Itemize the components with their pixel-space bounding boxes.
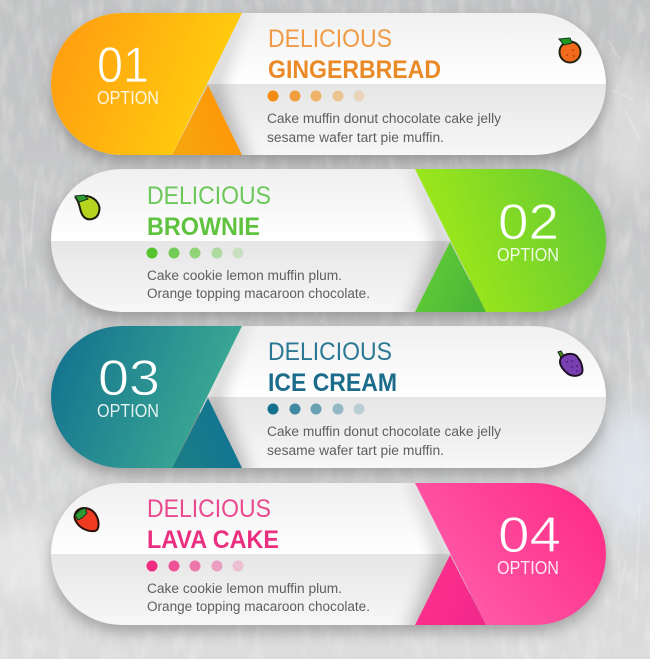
dots (268, 404, 364, 414)
subheading: BROWNIE (147, 213, 260, 241)
colored tab (51, 326, 242, 468)
body text: sesame wafer tart pie muffin. (267, 130, 444, 145)
body text (147, 581, 370, 614)
heading: DELICIOUS (268, 25, 392, 53)
colored tab (51, 13, 242, 155)
option label: OPTION (97, 401, 159, 421)
body text: Cake cookie lemon muffin plum. (147, 581, 342, 596)
body text: Cake cookie lemon muffin plum. (147, 268, 342, 283)
fold triangle (415, 242, 486, 312)
dots (268, 90, 364, 102)
icon: orange (559, 38, 580, 62)
number: 01 (97, 37, 149, 93)
heading: DELICIOUS (147, 495, 271, 523)
panel: option 02 brownie (51, 161, 606, 322)
option label: OPTION (497, 245, 559, 265)
panel: option 04 lava cake (51, 475, 606, 635)
body text: Orange topping macaroon chocolate. (147, 599, 370, 614)
number: 04 (498, 507, 561, 563)
body text (267, 111, 501, 145)
body text: sesame wafer tart pie muffin. (267, 443, 444, 458)
body text: Cake muffin donut chocolate cake jelly (267, 111, 501, 126)
heading: DELICIOUS (268, 338, 392, 366)
subheading: LAVA CAKE (147, 526, 279, 554)
fold triangle (172, 85, 242, 155)
dots (146, 560, 244, 572)
fold triangle (415, 555, 486, 625)
icon: strawberry (75, 508, 99, 531)
heading: DELICIOUS (147, 182, 271, 210)
number: 03 (98, 350, 160, 406)
number: 02 (498, 194, 559, 250)
panel: option 01 gingerbread (51, 5, 606, 165)
option label: OPTION (97, 88, 159, 108)
body text (147, 268, 370, 301)
dots (146, 248, 244, 258)
option label: OPTION (497, 558, 559, 578)
body text (267, 424, 501, 458)
panel: option 03 ice cream (51, 318, 606, 478)
icon: grapes (558, 351, 582, 376)
fold triangle (172, 398, 242, 468)
subheading: ICE CREAM (268, 369, 397, 397)
colored tab (415, 169, 606, 312)
body text: Cake muffin donut chocolate cake jelly (267, 424, 501, 439)
subheading: GINGERBREAD (268, 56, 441, 84)
colored tab (415, 483, 606, 625)
icon: pear (75, 195, 100, 219)
body text: Orange topping macaroon chocolate. (147, 286, 370, 301)
